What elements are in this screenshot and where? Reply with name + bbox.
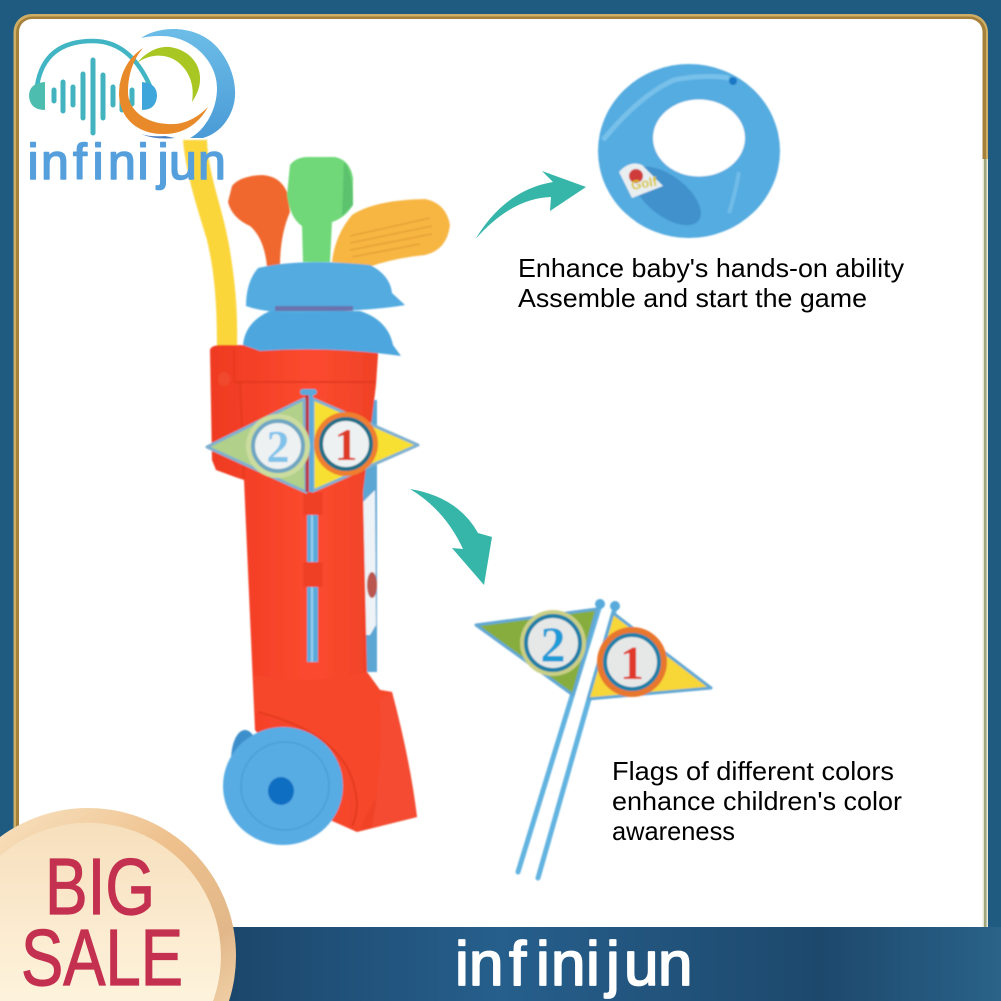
number 2 disc [520,610,586,676]
wheel ring [241,742,329,830]
strap upper [303,492,323,515]
blue lower sliver [141,134,175,138]
flag 1 on bag [313,399,418,491]
strap lower [303,562,323,587]
red bag body [210,345,417,832]
arrow to flags [410,489,492,585]
number 1 disc: 1 [620,637,644,690]
text: hands-on ability: Assemble and start the game [518,283,867,313]
pocket button [218,372,230,386]
bottom banner [0,927,1001,1001]
text: hands-on ability [518,253,904,313]
right ear cup [142,82,157,110]
number 1 disc [597,627,667,697]
red mark on label [367,572,377,598]
headband [37,41,150,86]
bag lower cap [243,311,401,356]
yellow club head [332,199,450,266]
wheel arch [258,712,357,826]
orange crescent [119,48,208,134]
big sale badge [0,808,236,1001]
sticker [619,164,663,198]
text: color awareness [612,756,902,846]
gap between caps [275,306,353,311]
ring cap part [598,64,780,238]
sticker red ball [629,169,643,183]
yellow flag [588,613,711,699]
rear panel of bag [360,400,377,672]
arrow to ring [476,171,586,239]
green club texture [342,162,353,216]
golf bag toy [183,140,450,845]
BIG label: BIG [45,842,155,931]
badge face [0,823,221,1001]
ring lower ridge [729,172,739,213]
green flag [476,609,597,695]
left ear cup [29,82,45,110]
left pole [518,605,600,872]
flag pole on bag [307,495,318,662]
orange club [228,175,290,266]
logo wordmark: infinijun [28,134,226,190]
number 1 badge: 1 [334,419,358,470]
ring hole [653,100,745,176]
green crescent [137,47,200,102]
pole knobs [303,389,314,395]
number 1 badge [314,412,378,476]
right pole [538,608,615,878]
number 2 badge: 2 [266,421,290,472]
pole knob left [595,599,605,609]
banner brand name: infinijun [455,930,692,999]
sticker text: Golf [630,174,659,193]
blue crescent [141,29,235,138]
pocket seam [234,350,244,478]
ring [598,64,780,238]
text: hands-on ability: Enhance baby's hands-on ability [518,253,904,283]
number 2 disc: 2 [540,616,566,672]
flag poles top [306,392,308,492]
sound wave bars [54,60,132,133]
rear wheel [231,730,259,790]
text: color awareness: awareness [612,816,735,846]
number 2 badge [246,414,310,478]
separate flags [476,599,711,878]
ball window [623,156,711,236]
ring upper ridge [603,76,729,140]
text: color awareness: enhance children's color [612,786,902,816]
club head grooves [350,218,432,257]
wheel hub [268,777,294,805]
logo: headphones and circles [28,29,235,190]
badge ring [0,808,236,1001]
rim shadow [234,381,376,383]
flag 2 on bag [207,399,306,492]
text: color awareness: Flags of different colors [612,756,894,786]
bag upper cap [246,262,405,313]
blue pole top [309,392,313,492]
yellow club shaft [183,140,237,347]
rear foot shade [372,692,417,828]
SALE label: SALE [21,913,183,1001]
white label on rear panel [360,490,376,635]
ring small dot [729,77,737,85]
pole knob right [610,601,620,611]
front wheel [223,727,343,845]
green club [287,157,353,262]
body lower panel shade [254,672,392,832]
pole highlight [311,495,313,662]
